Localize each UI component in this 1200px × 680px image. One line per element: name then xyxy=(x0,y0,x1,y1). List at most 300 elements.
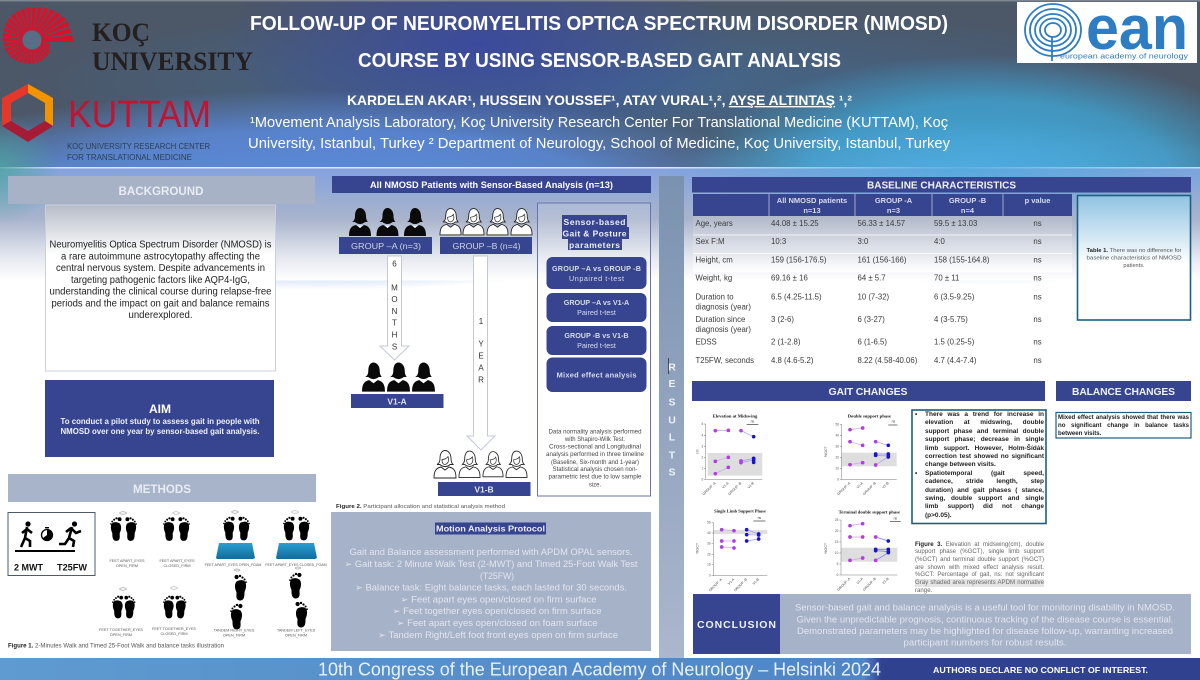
button: group A vs V1-A: Paired t-test xyxy=(577,308,616,317)
figure: balance tasks illustration xyxy=(99,511,327,638)
chart: double support phase: 50 xyxy=(835,422,839,426)
table row: weight: Weight, kg xyxy=(696,274,732,282)
chart: single limb support phase: 0 xyxy=(709,574,711,578)
statistical analysis note: size. xyxy=(589,482,601,488)
label: group A: GROUP –A (n=3) xyxy=(351,241,421,251)
results strip: L xyxy=(669,432,676,444)
figure 3 caption: (%GCT) and terminal double support (%GCT) xyxy=(915,556,1044,563)
table row: height: Height, cm xyxy=(696,256,733,264)
chart: terminal double support phase: 5 xyxy=(837,562,839,566)
foot pair: feet apart eyes closed firm: FEET APART_EYES xyxy=(159,559,195,563)
conflict of interest: AUTHORS DECLARE NO CONFLICT OF INTEREST. xyxy=(933,665,1148,675)
gait findings text xyxy=(915,411,1044,519)
button: group A vs group B xyxy=(546,257,646,289)
button: group A vs group B: GROUP –A vs GROUP -B xyxy=(552,264,641,273)
foot pair: tandem left: TANDEM LEFT_EYES xyxy=(277,628,316,632)
table row: duration to diagnosis xyxy=(696,292,1042,312)
heading: methods xyxy=(8,474,316,502)
logo: Koc University xyxy=(6,14,253,76)
logo: European Academy of Neurology xyxy=(1017,0,1197,63)
statistical analysis note: with Shapiro-Wilk Test. xyxy=(564,437,625,443)
button: group B vs V1-B: Paired t-test xyxy=(577,341,616,350)
arrow: 6 months: T xyxy=(392,318,397,328)
statistical analysis note xyxy=(546,430,645,488)
arrow: 6 months xyxy=(380,256,409,360)
figure 3 caption xyxy=(915,540,1044,594)
title: FOLLOW-UP OF NEUROMYELITIS OPTICA SPECTRUM DISORDER (NMOSD) xyxy=(250,13,948,35)
button: group A vs group B: Unpaired t-test xyxy=(569,274,624,283)
chart: terminal double support phase: %GCT xyxy=(824,542,828,554)
table row: duration since diagnosis: 4 (3-5.75) xyxy=(934,315,968,324)
logo: KUTTAM xyxy=(2,84,211,162)
table row: height: 158 (155-164.8) xyxy=(934,256,990,264)
table row: T25FW: 4.7 (4.4-7.4) xyxy=(934,356,977,365)
gait findings text: correction test showed no significant xyxy=(925,453,1044,460)
footer xyxy=(0,658,1200,680)
table row: weight: 70 ± 11 xyxy=(934,274,959,282)
chart: double support phase: %GCT xyxy=(824,445,828,457)
heading: all patients xyxy=(332,176,651,193)
background text block: Neuromyelitis Optica Spectrum Disorder (NMOSD) is xyxy=(50,240,272,250)
background text block xyxy=(46,205,276,371)
chart: elevation at midswing: GROUP -A xyxy=(702,481,717,496)
table header row: All NMOSD patients xyxy=(777,196,847,205)
table row: duration to diagnosis: 10 (7-32) xyxy=(858,292,890,302)
parameters heading xyxy=(562,215,629,250)
protocol text: ➢ Balance task: Eight balance tasks, each lasted for 30 seconds. xyxy=(355,582,627,592)
chart: single limb support phase: %GCT xyxy=(696,542,700,554)
button: group A vs V1-A xyxy=(546,293,646,322)
chart: double support phase: 30 xyxy=(835,444,839,448)
table row: EDSS: 2 (1-2.8) xyxy=(771,338,801,346)
statistical analysis note: parametric test due to low sample xyxy=(548,474,642,480)
chart: single limb support phase: 40 xyxy=(707,531,711,535)
table row: T25FW: 4.8 (4.6-5.2) xyxy=(771,356,814,365)
heading: balance changes: BALANCE CHANGES xyxy=(1072,387,1175,398)
gait findings text: support phase; decrease in single xyxy=(925,436,1044,443)
table 1 caption box: patients. xyxy=(1123,263,1145,269)
chart: terminal double support phase: 0 xyxy=(837,573,839,577)
table row: duration to diagnosis: Duration to xyxy=(696,292,734,302)
table row: duration to diagnosis: 6.5 (4.25-11.5) xyxy=(771,292,822,302)
chart: double support phase: Double support phase xyxy=(848,413,891,418)
panel: conclusion: CONCLUSION xyxy=(697,619,776,631)
table header row: GROUP -A xyxy=(875,196,913,205)
foot pair: tandem left xyxy=(277,567,316,638)
logo: Koc University: KOÇ xyxy=(92,18,150,47)
foot pair: feet apart eyes closed firm xyxy=(159,512,195,568)
table header row: GROUP -B xyxy=(949,196,987,205)
figure: walk tests icon box: 2 MWT xyxy=(14,562,43,572)
table header row: n=4 xyxy=(961,206,975,215)
chart: single limb support phase: ns xyxy=(758,516,761,520)
people: group A xyxy=(349,208,426,236)
results strip: T xyxy=(669,450,676,462)
gait findings text: support phase and terminal double xyxy=(925,428,1044,435)
conclusion text: participant numbers for robust results. xyxy=(904,638,1066,648)
balance findings text: between visits. xyxy=(1058,430,1101,436)
chart: elevation at midswing: GROUP -B xyxy=(727,481,743,496)
button: group A vs V1-A: GROUP –A vs V1-A xyxy=(564,298,629,307)
conclusion text: Demonstrated parameters may be highlighted for disease follow-up, warranting increased xyxy=(797,626,1173,636)
table header row: n=3 xyxy=(887,206,900,215)
affiliations: University, Istanbul, Turkey ² Department of Neurology, School of Medicine, Koç University, Istanbul, Turkey xyxy=(248,136,951,152)
panel: aim xyxy=(45,380,274,457)
chart: terminal double support phase xyxy=(824,509,901,592)
logo: European Academy of Neurology: european academy of neurology xyxy=(1060,52,1188,60)
table row: sex: ns xyxy=(1033,237,1042,246)
table row: duration to diagnosis: 6 (3.5-9.25) xyxy=(934,292,975,302)
icon: walker xyxy=(21,521,32,547)
protocol text: ➢ Feet apart eyes open/closed on firm surface xyxy=(400,594,596,604)
heading: baseline characteristics xyxy=(692,177,1191,192)
chart: single limb support phase: V1-A xyxy=(727,577,736,586)
table row: weight: 69.16 ± 16 xyxy=(771,274,808,282)
table row: height: 161 (156-166) xyxy=(858,256,907,264)
chart: double support phase: V1-A xyxy=(856,481,865,490)
protocol text: ➢ Gait task: 2 Minute Walk Test (2-MWT) and Timed 25-Foot Walk Test xyxy=(344,559,638,569)
conclusion text: Sensor-based gait and balance analysis is a useful tool for monitoring disability in NMOSD. xyxy=(795,602,1175,612)
panel: background xyxy=(8,176,315,371)
chart: single limb support phase: V1-B xyxy=(752,577,761,586)
arrow: 1 year: R xyxy=(478,376,484,384)
protocol text: ➢ Feet apart eyes open/closed on foam surface xyxy=(396,618,598,628)
gait findings text: duration) and gait phases ( stance, xyxy=(925,487,1044,494)
congress line: 10th Congress of the European Academy of Neurology – Helsinki 2024 xyxy=(318,660,881,680)
chart: terminal double support phase: GROUP -B xyxy=(862,576,878,592)
heading: gait changes xyxy=(692,381,1045,401)
table row: T25FW xyxy=(696,356,1042,365)
figure: walk tests icon box xyxy=(8,512,95,576)
chart: double support phase: 40 xyxy=(835,433,839,437)
chart: elevation at midswing: 3 xyxy=(701,444,703,448)
label: V1-A xyxy=(351,394,444,408)
table row: age: Age, years xyxy=(696,219,733,228)
authors: KARDELEN AKAR¹, HUSSEIN YOUSSEF¹, ATAY VURAL¹,², AYŞE ALTINTAŞ ¹,² xyxy=(347,93,853,108)
gait findings text: cadence, stride length, step xyxy=(925,478,1044,485)
results strip: R xyxy=(668,362,676,374)
table row: weight xyxy=(696,274,1042,282)
icon: stopwatch xyxy=(42,527,52,540)
label: V1-B: V1-B xyxy=(474,484,494,494)
chart: elevation at midswing: V1-B xyxy=(747,481,756,490)
logo: KUTTAM: KUTTAM xyxy=(68,94,211,136)
protocol text: (T25FW) xyxy=(480,571,514,581)
statistical analysis note: analysis performed in three timeline xyxy=(546,452,645,458)
people: V1-A xyxy=(362,362,435,392)
figure 1 caption: Figure 1. 2-Minutes Walk and Timed 25-Foot Walk and balance tasks illustration xyxy=(8,644,224,650)
conclusion text xyxy=(795,602,1175,648)
chart: terminal double support phase: 25 xyxy=(835,518,839,522)
table row: T25FW: ns xyxy=(1033,356,1042,365)
chart: terminal double support phase: ns xyxy=(894,517,897,521)
statistical analysis note: Cross-sectional and Longitudinal xyxy=(549,444,641,450)
chart: double support phase xyxy=(824,413,897,496)
arrow: 6 months: H xyxy=(392,330,398,340)
foot pair: feet together eyes closed firm: FEET TOGETHER_EYES xyxy=(152,627,196,631)
gait findings text: limb support. However, Holm-Šídák xyxy=(925,445,1044,452)
gait findings box frame xyxy=(912,410,1046,524)
results strip: U xyxy=(668,414,676,426)
statistical analysis note: (Baseline, Six-month and 1-year) xyxy=(551,460,639,466)
foot pair: feet apart eyes open foam xyxy=(205,511,261,567)
figure: walk tests icon box: T25FW xyxy=(57,562,87,572)
chart: single limb support phase: 30 xyxy=(707,542,711,546)
statistical analysis note: Data normality analysis performed xyxy=(548,430,642,436)
chart: double support phase: V1-B xyxy=(881,481,890,490)
figure 3 highlight xyxy=(915,579,1044,587)
panel: aim: NMOSD over one year by sensor-based gait analysis. xyxy=(60,427,260,436)
heading: background: BACKGROUND xyxy=(118,184,204,198)
figure 3 caption: %GCT: Percentage of gait, ns: not significant xyxy=(915,571,1044,578)
chart: single limb support phase: GROUP -A xyxy=(708,577,724,593)
balance findings box frame xyxy=(1056,412,1191,438)
arrow: 1 year xyxy=(467,256,495,450)
statistical analysis note: Statistical analysis chosen non- xyxy=(552,467,638,473)
gait findings text: swing, double support and single xyxy=(925,495,1044,502)
heading: balance changes xyxy=(1056,381,1191,401)
chart: elevation at midswing: cm xyxy=(695,449,699,454)
table row: weight: ns xyxy=(1033,274,1042,282)
table row: height xyxy=(696,256,1042,264)
logo: KUTTAM: KOÇ UNIVERSITY RESEARCH CENTER xyxy=(67,142,210,151)
chart: terminal double support phase: Terminal double support phase xyxy=(839,509,900,514)
figure 3 caption: Gray shaded area represents APDM normative xyxy=(915,579,1044,586)
background text block: underexplored. xyxy=(128,310,192,321)
results strip: S xyxy=(668,466,676,478)
table row: height: ns xyxy=(1033,256,1042,264)
arrow: 1 year: A xyxy=(478,364,484,372)
affiliations xyxy=(248,115,951,152)
foot pair: feet apart eyes closed foam xyxy=(265,511,327,567)
table row: age: 44.08 ± 15.25 xyxy=(771,219,819,228)
chart: elevation at midswing: ns xyxy=(751,419,754,423)
protocol text xyxy=(344,547,638,640)
results strip xyxy=(659,176,684,658)
parameters heading: Sensor-based xyxy=(564,217,626,227)
chart: terminal double support phase: 20 xyxy=(835,529,839,533)
figure 3 caption: support phase (%GCT), single limb support xyxy=(915,548,1044,555)
table row: EDSS: EDSS xyxy=(696,338,717,346)
table row: EDSS: 1.5 (0.25-5) xyxy=(934,338,975,346)
foot pair: feet apart eyes open foam: FEET APART_EYES OPEN_FOAM xyxy=(205,563,261,567)
arrow: 1 year: E xyxy=(478,352,484,360)
arrow: 1 year: 1 xyxy=(479,317,484,326)
gait findings text: change between visits. xyxy=(925,461,996,468)
arrow: 1 year: Y xyxy=(478,340,484,348)
button: group B vs V1-B: GROUP -B vs V1-B xyxy=(564,331,629,340)
figure 3 caption: Figure 3. Elevation at midswing(cm), double xyxy=(915,540,1044,548)
foot pair: feet together eyes closed firm: CLOSED_FIRM xyxy=(160,632,188,636)
panel: motion analysis protocol xyxy=(331,512,651,651)
results strip: S xyxy=(668,396,676,408)
table row: duration since diagnosis: diagnosis (year) xyxy=(696,325,751,334)
table row: age: ns xyxy=(1033,219,1042,228)
table row: T25FW: T25FW, seconds xyxy=(696,356,754,365)
background text block: periods and the impact on gait and balance remains xyxy=(52,298,270,310)
table row: T25FW: 8.22 (4.58-40.06) xyxy=(858,356,918,365)
table header row xyxy=(777,196,1050,215)
chart: single limb support phase: 10 xyxy=(707,563,711,567)
chart: elevation at midswing: 4 xyxy=(701,433,703,437)
foot pair: feet apart eyes open firm: OPEN_FIRM xyxy=(116,564,138,568)
chart: single limb support phase xyxy=(696,509,767,593)
foot pair: tandem right xyxy=(214,569,255,638)
chart: elevation at midswing: Elevation at Midswing xyxy=(713,413,758,418)
chart: double support phase: 10 xyxy=(835,466,839,470)
arrow: 6 months: N xyxy=(392,307,398,316)
balance findings text: no significant change in balance tasks xyxy=(1058,422,1189,428)
background text block: a rare autoimmune astrocytopathy affecting the xyxy=(61,252,260,262)
icon: runner xyxy=(59,521,81,547)
button: mixed effect analysis xyxy=(546,358,646,392)
table 1 caption box: baseline characteristics of NMOSD xyxy=(1086,256,1182,262)
page background gradient xyxy=(0,114,1200,280)
title: COURSE BY USING SENSOR-BASED GAIT ANALYSIS xyxy=(358,50,841,72)
heading: baseline characteristics: BASELINE CHARACTERISTICS xyxy=(867,180,1016,192)
table header row: p value xyxy=(1025,196,1050,205)
gait findings text: • xyxy=(915,411,917,418)
table: baseline characteristics xyxy=(693,194,1072,365)
foot pair: feet together eyes open firm xyxy=(99,588,143,637)
heading: background xyxy=(8,176,315,204)
figure 3 caption: are shown with mixed effect analysis result. xyxy=(915,564,1044,571)
gait findings text: There was a trend for increase in xyxy=(925,411,1044,418)
protocol text: ➢ Feet together eyes open/closed on firm surface xyxy=(392,606,602,616)
table row: height: 159 (156-176.5) xyxy=(771,256,827,264)
protocol text: ➢ Tandem Right/Left foot front eyes open on firm surface xyxy=(378,630,618,640)
chart: elevation at midswing xyxy=(695,413,762,496)
heading: gait changes: GAIT CHANGES xyxy=(828,386,908,398)
panel: aim: AIM xyxy=(149,402,171,416)
arrow: 6 months: S xyxy=(392,342,397,352)
table row: duration since diagnosis: 3 (2-6) xyxy=(771,315,794,324)
title xyxy=(250,13,948,72)
table row: age xyxy=(696,219,1042,228)
label: V1-A: V1-A xyxy=(387,396,407,406)
chart: terminal double support phase: V1-A xyxy=(856,576,865,585)
logo: Koc University: UNIVERSITY xyxy=(92,47,253,76)
table row: duration since diagnosis xyxy=(696,315,1042,334)
foot pair: tandem right: OPEN_FIRM xyxy=(223,634,245,638)
table 1 caption box xyxy=(1078,196,1190,320)
chart: terminal double support phase: V1-B xyxy=(881,576,890,585)
table row: age: 56.33 ± 14.57 xyxy=(858,219,905,228)
label: group B: GROUP –B (n=4) xyxy=(452,241,521,251)
chart: elevation at midswing: 2 xyxy=(701,455,703,459)
heading: all patients: All NMOSD Patients with Sensor-Based Analysis (n=13) xyxy=(370,180,613,191)
conclusion text: Given the unpredictable prognosis, continuous tracking of the disease course is essential. xyxy=(796,614,1174,624)
table row: age: 59.5 ± 13.03 xyxy=(934,219,977,228)
panel: conclusion xyxy=(693,594,1191,654)
figure 2 caption: Figure 2. Participant allocation and statistical analysis method xyxy=(336,504,505,510)
protocol heading: Motion Analysis Protocol xyxy=(436,524,545,534)
table row: duration since diagnosis: Duration since xyxy=(696,315,745,324)
gait findings text: limb support) did not change xyxy=(925,503,1044,510)
chart: terminal double support phase: 15 xyxy=(835,540,839,544)
foot pair: feet apart eyes open firm xyxy=(109,512,145,568)
chart: single limb support phase: 50 xyxy=(707,521,711,525)
gait charts xyxy=(695,413,901,593)
table row: sex: 10:3 xyxy=(771,237,786,246)
table row: sex: 4:0 xyxy=(934,237,946,246)
chart: single limb support phase: 20 xyxy=(707,552,711,556)
results strip: E xyxy=(668,378,676,390)
foot pair: feet apart eyes open firm: FEET APART_EYES xyxy=(109,559,145,563)
table row: duration since diagnosis: ns xyxy=(1033,315,1042,324)
table header row: n=13 xyxy=(803,206,821,215)
panel: aim: To conduct a pilot study to assess gait in people with xyxy=(60,417,260,426)
chart: elevation at midswing: 0 xyxy=(701,477,703,481)
parameters heading: parameters xyxy=(569,240,620,250)
button: group B vs V1-B xyxy=(546,326,646,355)
arrow: 6 months: 6 xyxy=(392,260,397,268)
foot pair: feet apart eyes closed foam: FEET APART_EYES CLOSED_FOAM xyxy=(265,563,327,567)
parameters heading: Gait & Posture xyxy=(562,228,627,238)
table row: duration since diagnosis: 6 (3-27) xyxy=(858,315,885,324)
foot pair: feet together eyes open firm: OPEN_FIRM xyxy=(110,633,132,637)
table row: duration to diagnosis: ns xyxy=(1033,292,1042,302)
logo: KUTTAM: FOR TRANSLATIONAL MEDICINE xyxy=(67,153,192,162)
header banner xyxy=(0,0,1200,290)
chart: terminal double support phase: 10 xyxy=(835,551,839,555)
foot pair: feet together eyes open firm: FEET TOGETHER_EYES xyxy=(99,628,143,632)
chart: double support phase: ns xyxy=(892,420,895,424)
figure 3 caption: range. xyxy=(915,587,932,594)
chart: elevation at midswing: V1-A xyxy=(721,481,730,490)
arrow: 6 months: M xyxy=(391,284,398,292)
foot pair: feet apart eyes closed firm: CLOSED_FIRM xyxy=(163,564,191,568)
table row: EDSS: 6 (1-6.5) xyxy=(858,338,887,346)
affiliations: ¹Movement Analysis Laboratory, Koç University Research Center For Translational Medicine (KUTTAM), Koç xyxy=(250,115,948,131)
background text block: understanding the clinical course during relapse-free xyxy=(50,286,272,298)
table row: weight: 64 ± 5.7 xyxy=(858,274,886,282)
figure: participant allocation xyxy=(332,176,651,496)
label: group A xyxy=(339,237,432,254)
foot pair: tandem left: OPEN_FIRM xyxy=(285,634,307,638)
chart: double support phase: 20 xyxy=(835,455,839,459)
people: V1-B xyxy=(434,450,527,478)
chart: double support phase: GROUP -A xyxy=(836,481,852,496)
background text block: central nervous system. Despite advancements in xyxy=(56,263,265,274)
protocol text: Gait and Balance assessment performed with APDM OPAL sensors. xyxy=(350,547,632,557)
heading: methods: METHODS xyxy=(133,482,191,496)
chart: terminal double support phase: GROUP -A xyxy=(836,576,852,592)
foot pair: feet together eyes closed firm xyxy=(152,587,196,636)
chart: single limb support phase: Single Limb Support Phase xyxy=(714,509,766,514)
table row: EDSS xyxy=(696,338,1042,346)
gait findings text: • xyxy=(915,470,917,477)
background text block: targeting pathogenic factors like AQP4-IgG, xyxy=(71,275,250,286)
label: V1-B xyxy=(438,482,530,496)
chart: double support phase: GROUP -B xyxy=(862,481,878,496)
gait findings text: Spatiotemporal (gait speed, xyxy=(925,470,1044,477)
balance findings text: Mixed effect analysis showed that there was xyxy=(1058,414,1189,420)
table row: sex: 3:0 xyxy=(858,237,869,246)
table row: sex xyxy=(696,237,1042,246)
gait findings text: elevation at midswing, double xyxy=(925,419,1044,426)
table row: duration to diagnosis: diagnosis (year) xyxy=(696,302,751,312)
people: group B xyxy=(440,209,532,235)
table row: EDSS: ns xyxy=(1033,338,1042,346)
arrow: 6 months: O xyxy=(391,295,398,304)
chart: elevation at midswing: 5 xyxy=(701,422,703,426)
panel: sensor-based parameters xyxy=(538,203,650,496)
table 1 caption box: Table 1. There was no difference for xyxy=(1086,248,1182,254)
balance findings text xyxy=(1058,414,1189,436)
chart: single limb support phase: GROUP -B xyxy=(733,577,749,593)
gait findings text: (p>0.05). xyxy=(925,512,952,519)
